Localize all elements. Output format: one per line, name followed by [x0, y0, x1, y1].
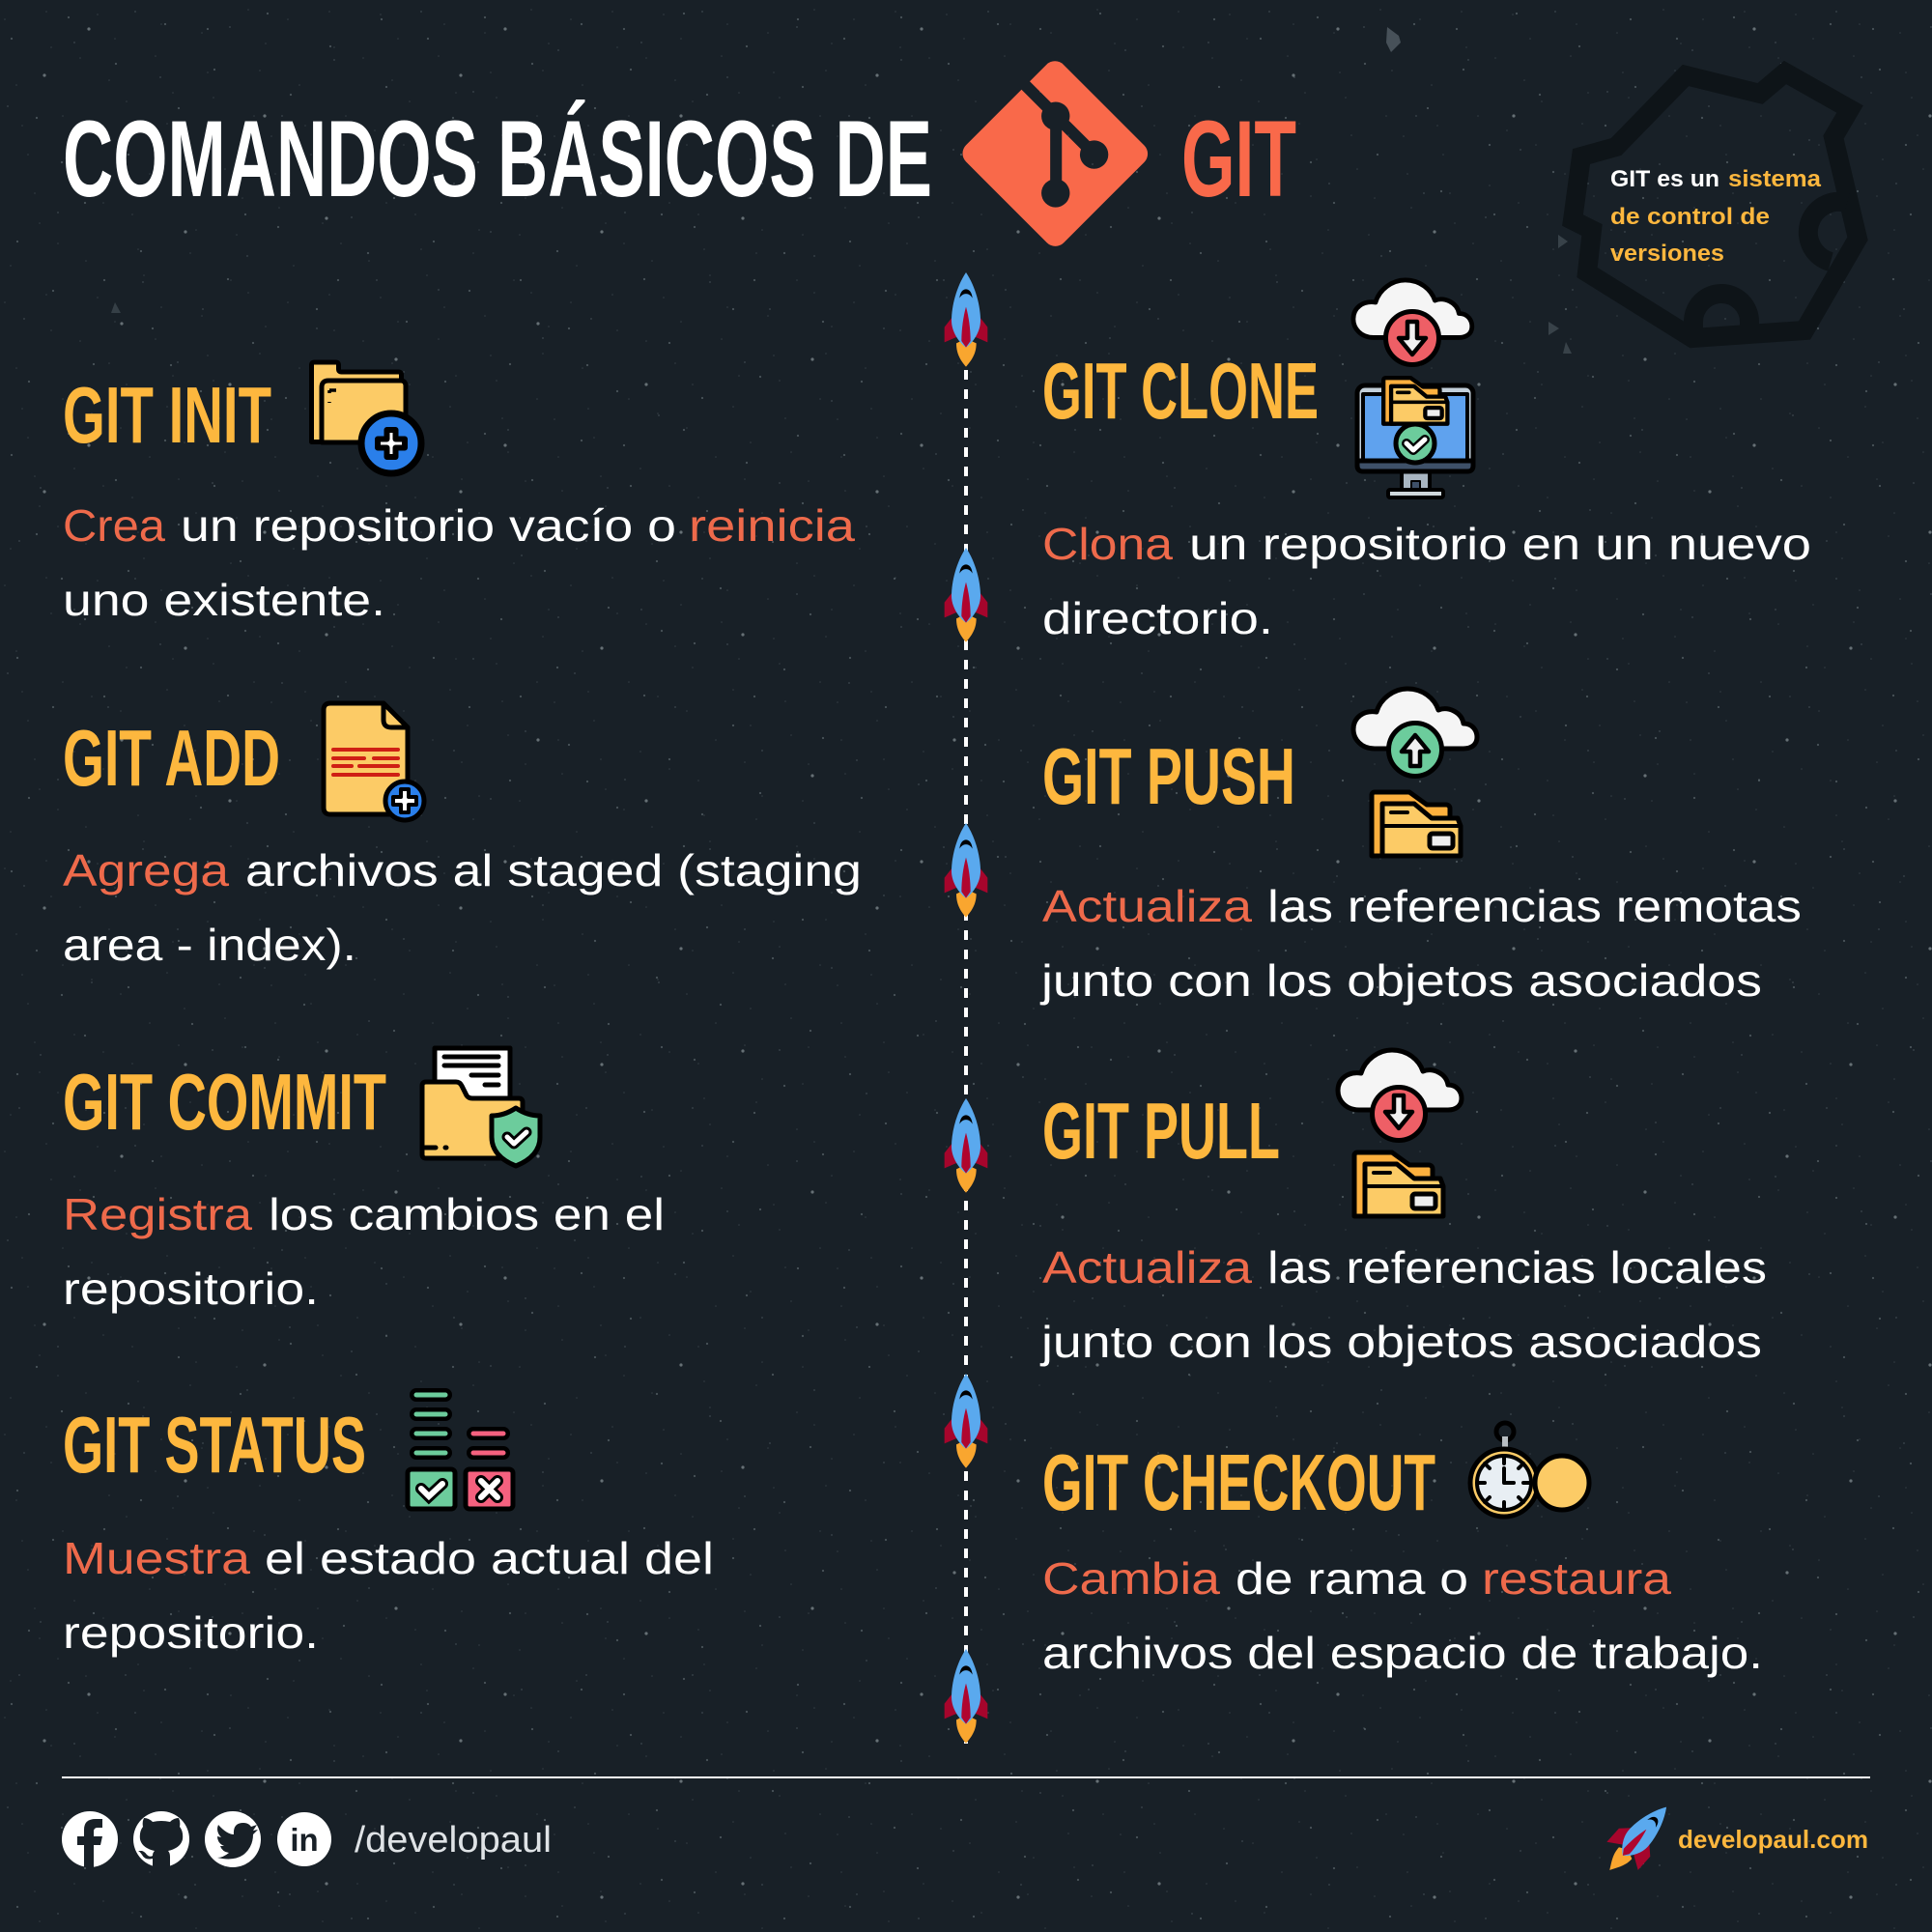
title: GIT	[1181, 99, 1296, 219]
panel: git push	[1039, 689, 1802, 1006]
callout: what is git: GIT es un	[1610, 166, 1719, 192]
panel: git commit	[63, 1048, 665, 1314]
description: Muestra	[63, 1533, 250, 1583]
icon: folder with shield	[422, 1048, 540, 1166]
timeline: dashed line	[964, 370, 968, 1744]
description: area - index).	[63, 920, 356, 970]
description	[1042, 1553, 1763, 1678]
description: los cambios en el	[269, 1189, 665, 1239]
icon: git logo	[962, 61, 1148, 246]
description: Clona	[1042, 519, 1173, 569]
timeline: rockets	[945, 272, 987, 1744]
description: un repositorio vacío o	[181, 500, 676, 551]
panel: git checkout	[1042, 1423, 1763, 1678]
footer: rocket logo	[1594, 1793, 1682, 1885]
description: un repositorio en un nuevo	[1189, 519, 1811, 569]
description	[1042, 519, 1811, 643]
description: de rama o	[1236, 1553, 1468, 1604]
description: Cambia	[1042, 1553, 1220, 1604]
description: restaura	[1482, 1553, 1671, 1604]
description: el estado actual del	[265, 1533, 714, 1583]
footer: website: developaul.com	[1678, 1825, 1868, 1854]
icon: stopwatch and coin	[1470, 1423, 1589, 1517]
icon: linkedin	[277, 1812, 331, 1866]
icon: twitter	[205, 1811, 261, 1867]
heading: GIT ADD	[63, 713, 280, 803]
description: las referencias locales	[1267, 1242, 1767, 1293]
description	[1039, 881, 1802, 1006]
description: repositorio.	[63, 1264, 319, 1314]
description: las referencias remotas	[1267, 881, 1802, 931]
icon: github	[133, 1811, 189, 1867]
icon: cloud upload and folder	[1353, 689, 1477, 856]
icon: cloud download and folder	[1338, 1050, 1462, 1216]
heading: GIT STATUS	[63, 1400, 366, 1490]
icon: linkedin: in	[290, 1822, 319, 1858]
footer: handle: /developaul	[355, 1820, 552, 1861]
description: junto con los objetos asociados	[1039, 1317, 1762, 1367]
icon: document with plus	[324, 703, 424, 820]
heading: GIT PUSH	[1042, 731, 1295, 821]
description	[1039, 1242, 1767, 1367]
description: archivos del espacio de trabajo.	[1042, 1628, 1763, 1678]
icon: folder with plus	[311, 362, 421, 473]
heading: GIT CHECKOUT	[1042, 1437, 1435, 1527]
description: reinicia	[689, 500, 855, 551]
callout: what is git: versiones	[1610, 241, 1724, 267]
description: Crea	[63, 500, 165, 551]
footer divider	[62, 1776, 1870, 1778]
description: Agrega	[63, 845, 229, 895]
description: Actualiza	[1042, 1242, 1252, 1293]
callout: what is git: de control de	[1610, 204, 1770, 230]
callout: what is git: sistema	[1728, 166, 1822, 192]
heading: GIT COMMIT	[63, 1057, 386, 1147]
icon: facebook	[62, 1811, 118, 1867]
panel: git clone	[1042, 280, 1811, 643]
heading: GIT INIT	[63, 370, 271, 460]
callout: what is git	[1573, 72, 1858, 338]
description: Actualiza	[1042, 881, 1252, 931]
panel: git init	[63, 362, 855, 625]
panel: git add	[63, 703, 862, 970]
description	[63, 1189, 665, 1314]
icon: status lists	[408, 1395, 513, 1509]
panel: git status	[63, 1395, 714, 1658]
description: directorio.	[1042, 593, 1273, 643]
description: junto con los objetos asociados	[1039, 955, 1762, 1006]
panel: git pull	[1039, 1050, 1767, 1367]
heading: GIT CLONE	[1042, 346, 1319, 436]
description: Registra	[63, 1189, 252, 1239]
description	[63, 1533, 714, 1658]
description	[63, 845, 862, 970]
footer: social icons	[62, 1811, 331, 1867]
description	[63, 500, 855, 625]
icon: cloud download and monitor	[1353, 280, 1473, 497]
heading: GIT PULL	[1042, 1086, 1280, 1176]
title: COMANDOS BÁSICOS DE	[63, 99, 932, 219]
description: archivos al staged (staging	[245, 845, 862, 895]
description: uno existente.	[63, 575, 385, 625]
description: repositorio.	[63, 1607, 319, 1658]
